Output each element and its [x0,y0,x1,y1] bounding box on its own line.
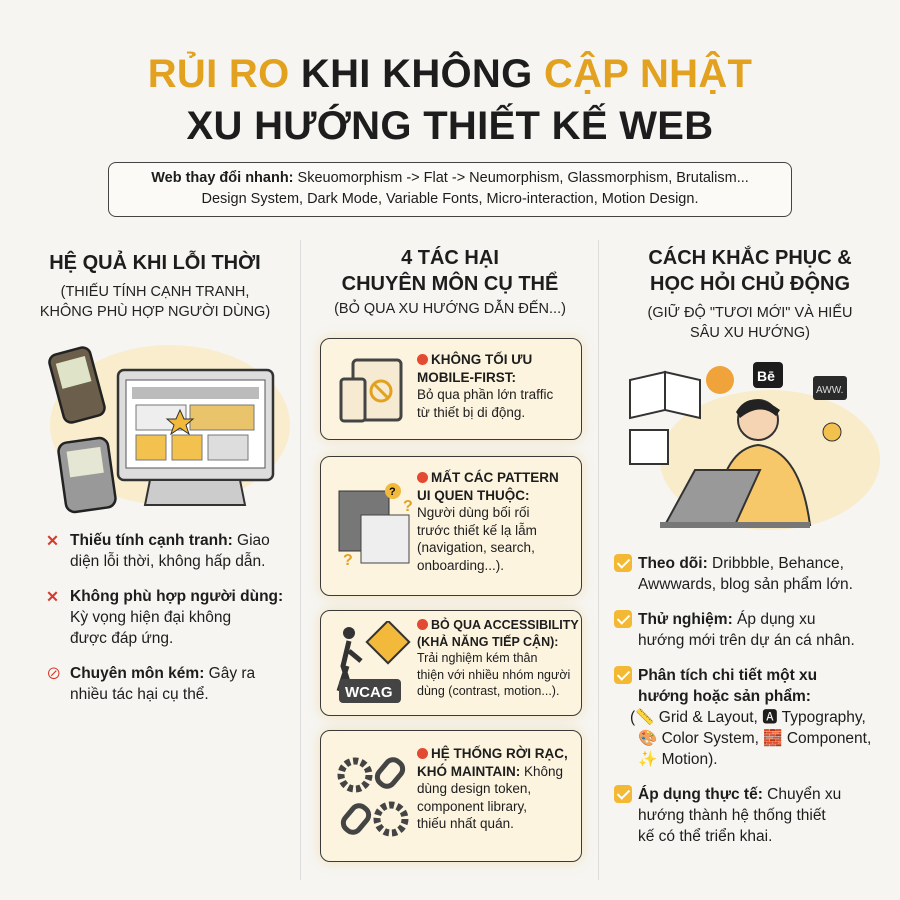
card 3: thiện với nhiều nhóm người [417,668,570,682]
card 2: trước thiết kế lạ lẫm [417,522,537,538]
card 1: KHÔNG TỐI ƯU [431,352,532,367]
illustration: designer [629,362,880,530]
right heading: SÂU XU HƯỚNG) [690,325,810,341]
illustration: designer: AWW. [816,385,843,396]
left list: ✕ [46,533,59,550]
right list: (📏 Grid & Layout, 🅰 Typography, [630,709,866,726]
icon: gears chain [338,757,408,836]
left list: Không phù hợp người dùng: [70,588,283,605]
left list: ✕ [46,589,59,606]
card 1: MOBILE-FIRST: [417,370,516,384]
middle heading [334,246,566,317]
icon: ui patterns: ? [403,498,413,515]
left list: ⊘ [46,666,62,683]
card 2: MẤT CÁC PATTERN [431,470,559,485]
right list: Awwwards, blog sản phẩm lớn. [638,576,853,593]
icon: ui patterns: ? [389,486,396,498]
card 3: (KHẢ NĂNG TIẾP CẬN): [417,634,558,648]
right list: Theo dõi: Dribbble, Behance, [638,555,844,572]
illustration: old devices [48,345,290,514]
left list: diện lỗi thời, không hấp dẫn. [70,553,265,570]
left heading [40,250,270,320]
left heading: (THIẾU TÍNH CẠNH TRANH, [61,284,249,300]
card 4: KHÓ MAINTAIN: Không [417,764,563,778]
right heading [648,246,852,341]
right heading: (GIỮ ĐỘ "TƯƠI MỚI" VÀ HIỂU [648,305,852,321]
left heading: HỆ QUẢ KHI LỖI THỜI [49,252,261,274]
left list: Chuyên môn kém: Gây ra [70,665,255,682]
left list [46,532,283,703]
card 4: dùng design token, [417,781,531,796]
subtitle box: Design System, Dark Mode, Variable Fonts, Micro-interaction, Motion Design. [202,191,698,207]
subtitle box: Web thay đổi nhanh: Skeuomorphism -> Flat -> Neumorphism, Glassmorphism, Brutalism... [151,170,749,186]
card 3: dùng (contrast, motion...). [417,684,559,698]
right list: ✨ Motion). [638,751,718,768]
middle heading: (BỎ QUA XU HƯỚNG DẪN ĐẾN...) [334,301,566,317]
card 2: UI QUEN THUỘC: [417,488,530,502]
left list: được đáp ứng. [70,630,173,647]
icon: wcag: WCAG [345,684,392,701]
card 1 [320,338,582,440]
middle heading: CHUYÊN MÔN CỤ THỂ [342,273,558,295]
subtitle box [108,162,792,217]
right list: Thử nghiệm: Áp dụng xu [638,611,815,628]
card 2 [320,456,582,596]
right list: hướng thành hệ thống thiết [638,807,826,824]
left list: nhiều tác hại cụ thể. [70,686,209,703]
title: XU HƯỚNG THIẾT KẾ WEB [187,104,713,148]
right list: 🎨 Color System, 🧱 Component, [638,730,871,747]
left heading: KHÔNG PHÙ HỢP NGƯỜI DÙNG) [40,304,270,320]
card 4: component library, [417,798,527,814]
right list: kế có thể triển khai. [638,828,772,845]
icon: ui patterns: ? [343,552,353,569]
card 4: HỆ THỐNG RỜI RẠC, [431,746,568,761]
card 2: (navigation, search, [417,540,535,555]
title: RỦI RO KHI KHÔNG CẬP NHẬT [148,52,752,96]
right list: Phân tích chi tiết một xu [638,667,817,684]
card 3: BỎ QUA ACCESSIBILITY [431,618,579,632]
right list: hướng hoặc sản phẩm: [638,688,811,705]
card 3 [320,610,582,716]
card 1: Bỏ qua phần lớn traffic [417,387,553,402]
right list: hướng mới trên dự án cá nhân. [638,632,855,649]
middle heading: 4 TÁC HẠI [401,247,499,269]
card 1: từ thiết bị di động. [417,404,525,420]
card 2: onboarding...). [417,558,504,572]
right heading: HỌC HỎI CHỦ ĐỘNG [650,273,850,295]
card 3: Trải nghiệm kém thân [417,651,537,665]
right heading: CÁCH KHẮC PHỤC & [648,247,852,269]
card 4 [320,730,582,862]
left list: Kỳ vọng hiện đại không [70,609,231,626]
card 4: thiếu nhất quán. [417,816,514,831]
right list [614,554,871,845]
icon: ui patterns [338,483,413,569]
left list: Thiếu tính cạnh tranh: Giao [70,532,270,549]
right list: Áp dụng thực tế: Chuyển xu [638,786,841,803]
icon: devices [340,358,402,422]
card 2: Người dùng bối rối [417,505,529,520]
illustration: designer: Bē [757,368,775,384]
icon: wcag [336,621,410,703]
title [148,51,752,148]
